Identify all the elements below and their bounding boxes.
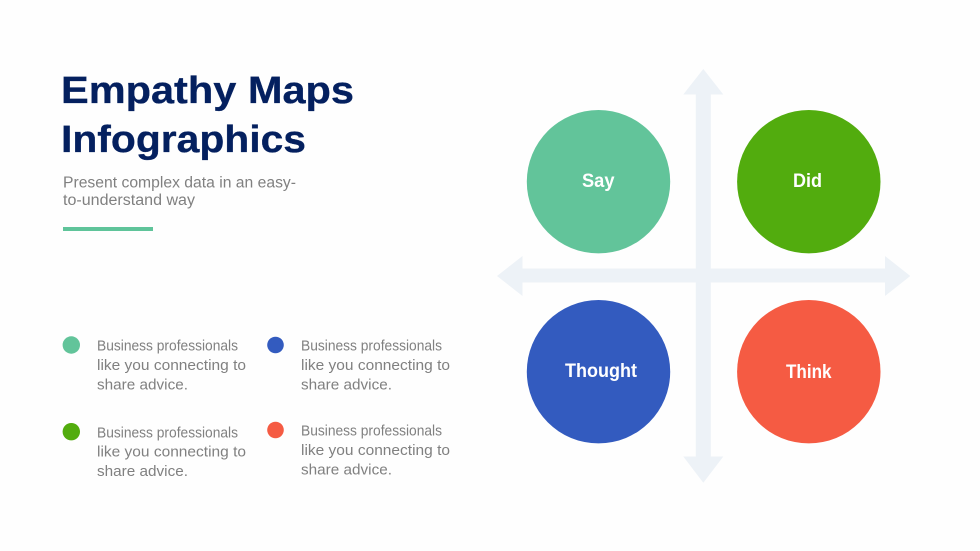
circle <box>737 110 880 253</box>
quadrant: Think <box>737 300 880 443</box>
legend text <box>301 338 450 393</box>
icon: green-teal dot <box>63 336 80 354</box>
label: Did <box>793 171 822 192</box>
legend text: like you connecting to <box>97 445 246 461</box>
arrow: horizontal double-headed axis <box>497 256 910 296</box>
subtitle: to-understand way <box>63 192 195 209</box>
legend text: share advice. <box>301 377 392 393</box>
circle <box>737 300 880 443</box>
legend text: share advice. <box>301 462 392 478</box>
legend text: Business professionals <box>301 424 442 440</box>
title: Empathy Maps <box>61 70 354 112</box>
arrow: vertical double-headed axis <box>683 69 723 483</box>
legend text: share advice. <box>97 464 188 480</box>
legend item: Think <box>267 422 450 478</box>
legend item: Say <box>63 336 246 393</box>
legend text <box>301 424 450 478</box>
icon: green dot <box>63 423 80 440</box>
subtitle: Present complex data in an easy- <box>63 174 296 192</box>
legend text <box>97 338 246 393</box>
legend text: like you connecting to <box>301 358 450 374</box>
quadrant: Did <box>737 110 880 253</box>
title <box>61 70 354 161</box>
legend text: Business professionals <box>97 425 238 441</box>
subtitle <box>63 174 296 209</box>
quadrant: Say <box>527 110 670 253</box>
circle <box>527 300 670 443</box>
legend item: Thought <box>267 337 450 393</box>
legend text: Business professionals <box>301 338 442 354</box>
label: Think <box>786 362 832 383</box>
legend item: Did <box>63 423 246 480</box>
legend text: like you connecting to <box>301 443 450 459</box>
label: Thought <box>565 361 638 382</box>
accent underline <box>63 227 153 231</box>
quadrant: Thought <box>527 300 670 443</box>
legend text: share advice. <box>97 377 188 393</box>
icon: red dot <box>267 422 284 438</box>
legend text <box>97 425 246 480</box>
title: Infographics <box>61 119 306 161</box>
legend text: like you connecting to <box>97 358 246 374</box>
circle <box>527 110 670 253</box>
icon: blue dot <box>267 337 284 353</box>
label: Say <box>582 171 615 192</box>
legend text: Business professionals <box>97 338 238 354</box>
